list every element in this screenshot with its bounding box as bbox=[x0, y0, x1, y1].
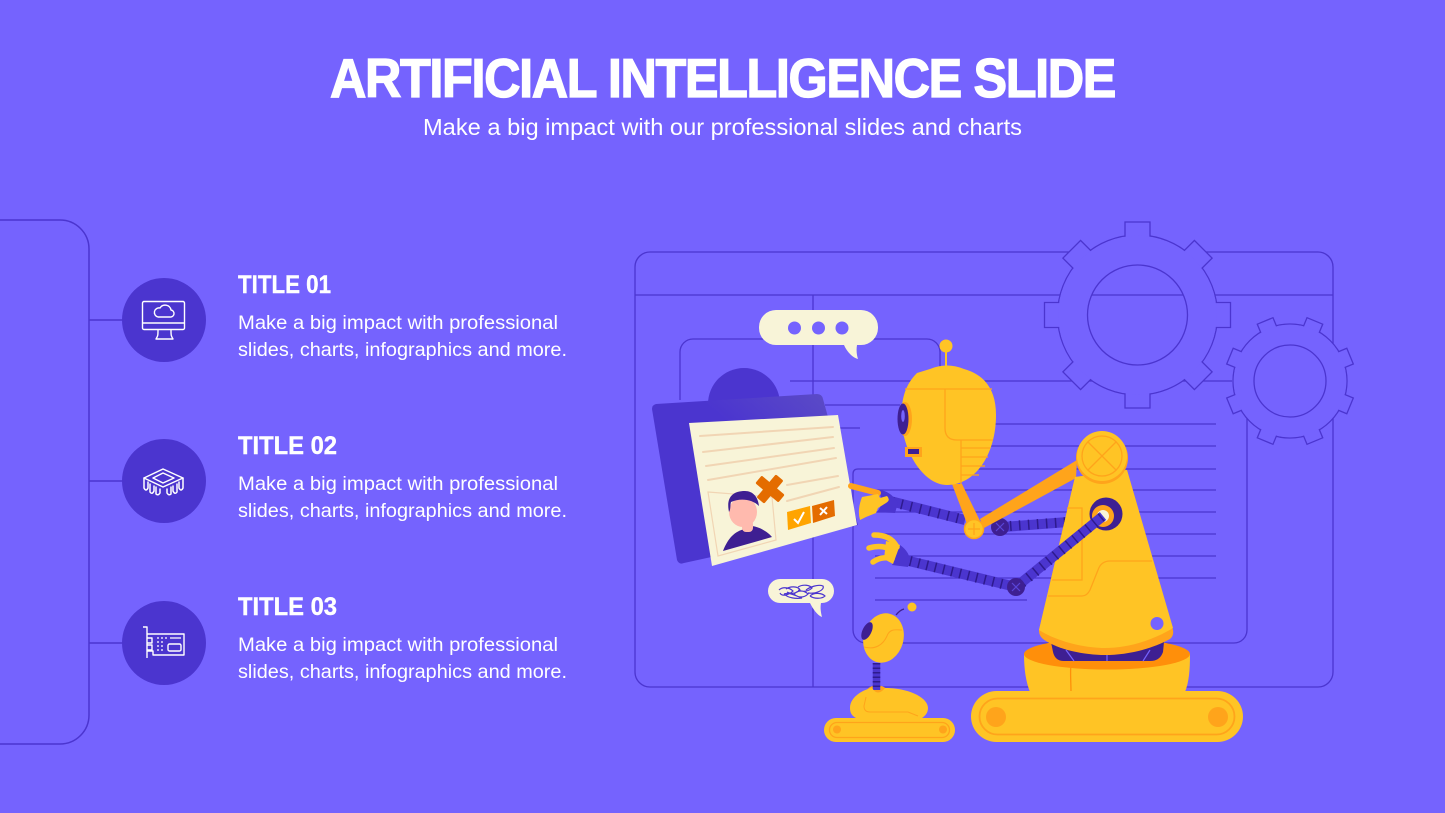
item 01 bbox=[122, 271, 567, 362]
icon: circuit card bbox=[122, 601, 206, 685]
small gear bbox=[1227, 318, 1353, 444]
robot tower body bbox=[1039, 470, 1173, 655]
profile portrait bbox=[723, 491, 772, 551]
large gear bbox=[1044, 222, 1230, 408]
clipboard bbox=[652, 368, 858, 564]
robot body base bbox=[1024, 638, 1190, 692]
neck joint bbox=[964, 520, 984, 538]
tower head disc bbox=[1076, 431, 1128, 484]
icon: monitor with cloud bbox=[122, 278, 206, 362]
heading 01: TITLE 01 bbox=[238, 271, 331, 299]
connector bracket bbox=[0, 220, 124, 744]
body text 03: Make a big impact with professional bbox=[238, 635, 558, 656]
heading 03: TITLE 03 bbox=[238, 593, 337, 621]
large robot tread bbox=[971, 691, 1243, 742]
reject cross bbox=[749, 468, 791, 510]
robot lower arm bbox=[905, 516, 1103, 596]
large robot arm: upper bbox=[890, 501, 1068, 536]
robot neck and orange arm bbox=[952, 460, 1077, 529]
body text 01 bbox=[238, 313, 567, 361]
small robot neck bbox=[867, 663, 887, 696]
approve button bbox=[787, 506, 811, 530]
text lines bbox=[700, 427, 839, 556]
speech bubble: scribble bbox=[768, 579, 834, 617]
body text 02: Make a big impact with professional bbox=[238, 474, 558, 495]
body text 01: Make a big impact with professional bbox=[238, 313, 558, 334]
body text 02 bbox=[238, 474, 567, 522]
icon: processor chip bbox=[122, 439, 206, 523]
body text 03: slides, charts, infographics and more. bbox=[238, 662, 567, 683]
body text 03 bbox=[238, 635, 567, 683]
small robot bbox=[824, 602, 955, 742]
speech bubble: typing bbox=[759, 310, 878, 359]
body text 01: slides, charts, infographics and more. bbox=[238, 340, 567, 361]
heading 02: TITLE 02 bbox=[238, 432, 337, 460]
small robot tread bbox=[824, 718, 955, 742]
small robot head bbox=[858, 602, 916, 667]
body text 02: slides, charts, infographics and more. bbox=[238, 501, 567, 522]
item 03 bbox=[122, 593, 567, 685]
subtitle: Make a big impact with our professional slides and charts bbox=[423, 114, 1022, 140]
small robot body bbox=[850, 688, 928, 718]
title: ARTIFICIAL INTELLIGENCE SLIDE bbox=[330, 47, 1115, 109]
pointing hand bbox=[851, 486, 898, 520]
paper card bbox=[689, 415, 857, 566]
shoulder joint bbox=[1090, 498, 1122, 530]
browser window outline bbox=[635, 252, 1333, 687]
reject button bbox=[812, 500, 835, 523]
robot head bbox=[898, 340, 996, 485]
open hand bbox=[869, 535, 910, 567]
item 02 bbox=[122, 432, 567, 523]
